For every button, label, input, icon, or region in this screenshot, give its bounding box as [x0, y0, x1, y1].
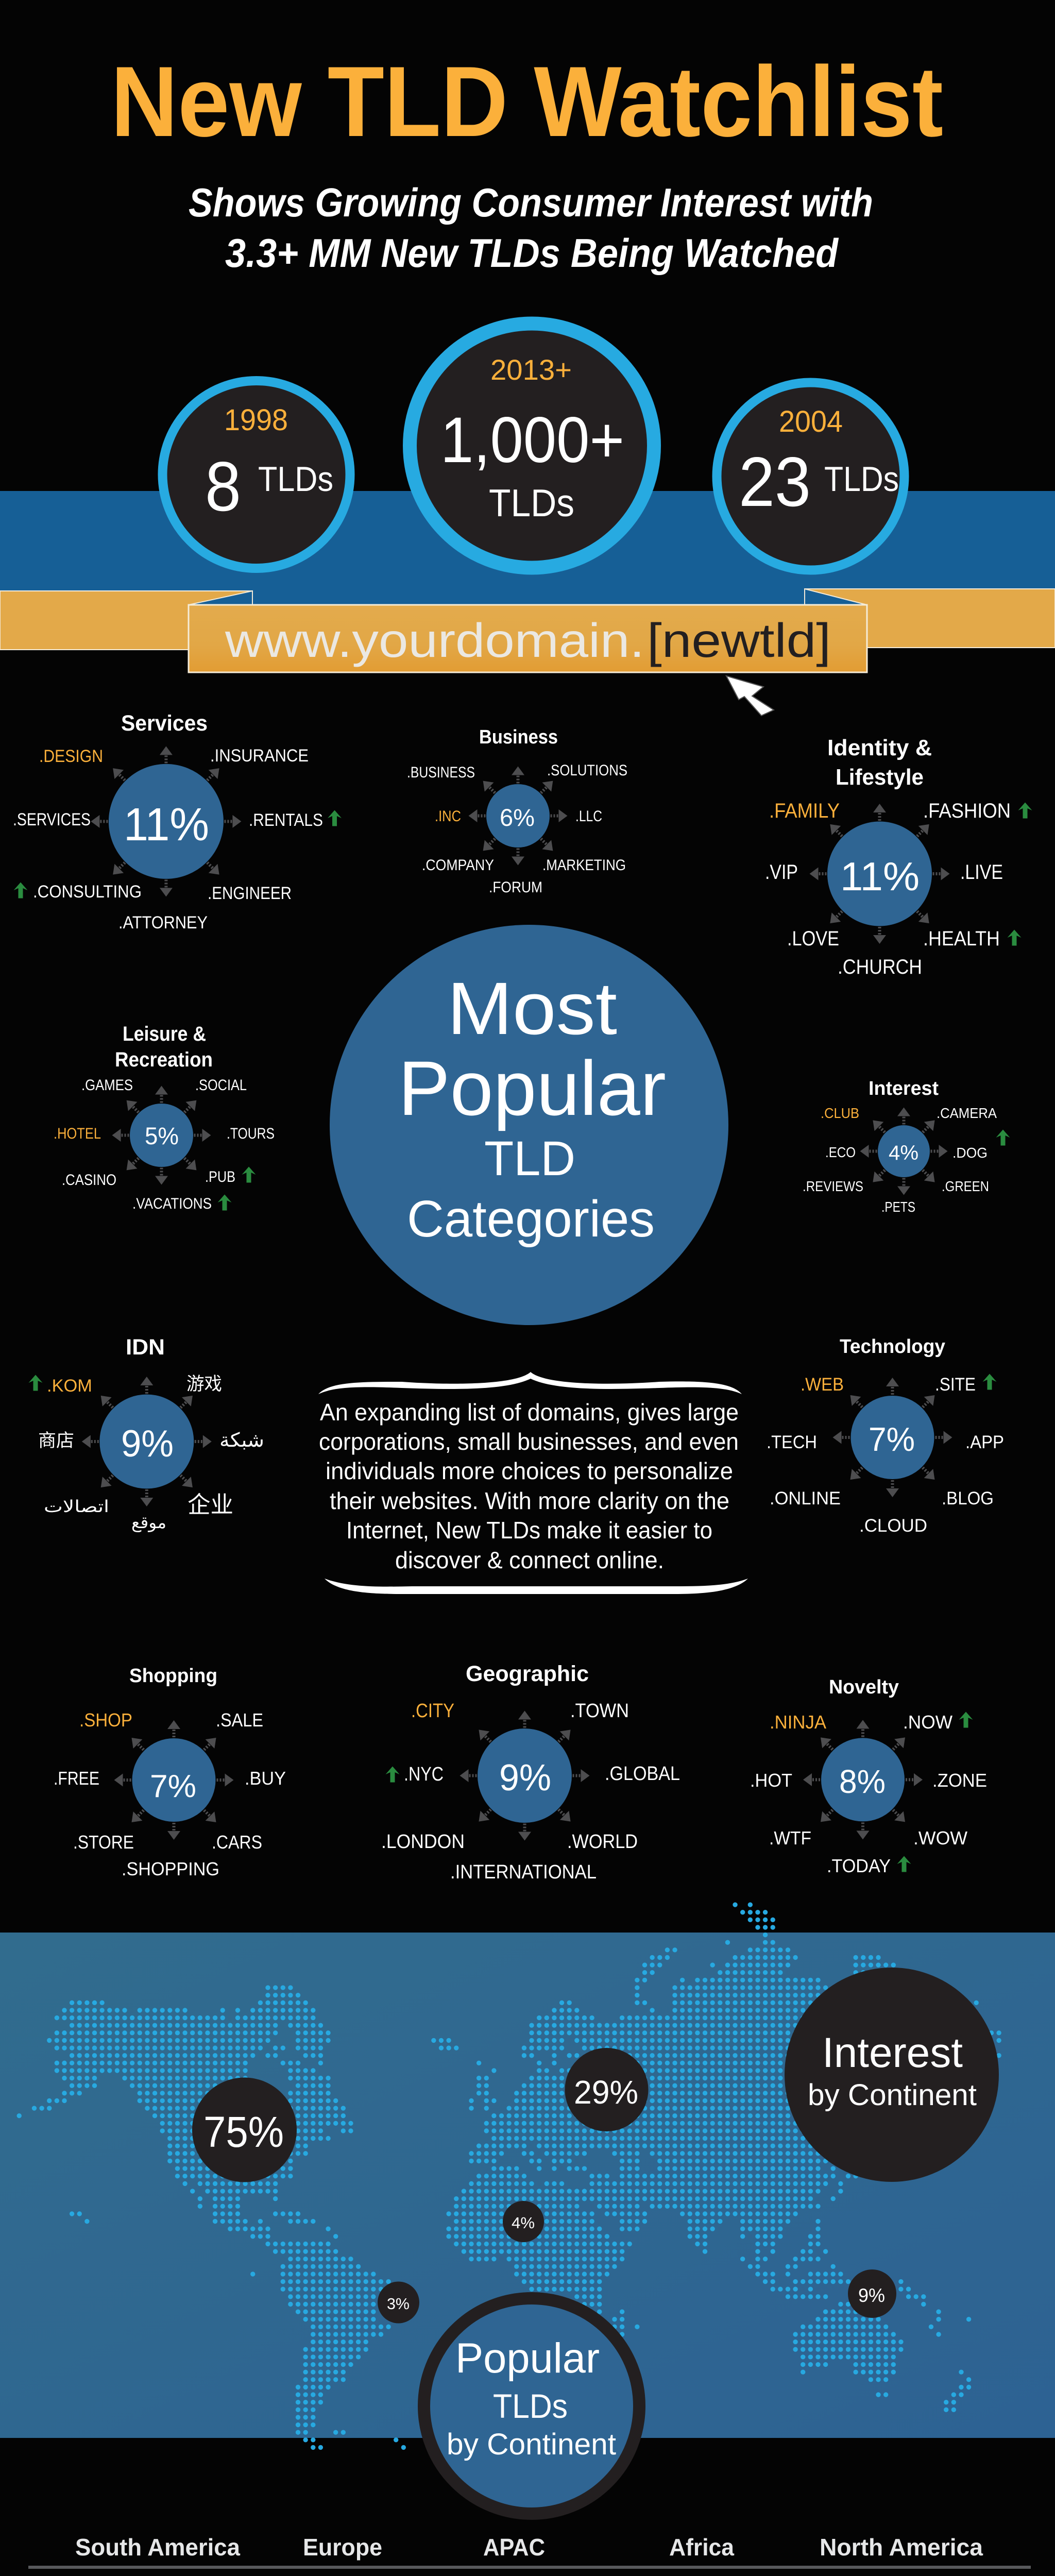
tld labels: .PUB — [205, 1168, 235, 1185]
tld labels — [13, 746, 342, 933]
circle: Most Popular TLD Categories: TLD — [484, 1131, 575, 1186]
tld labels: .KOM — [47, 1376, 92, 1396]
percentage circle — [851, 1396, 934, 1479]
tld labels: .ONLINE — [770, 1488, 841, 1509]
tld labels: .APP — [965, 1432, 1004, 1452]
bubble: 29% Europe — [565, 2048, 648, 2131]
tld labels: .GAMES — [81, 1077, 133, 1094]
panel: Business — [407, 726, 627, 896]
tld labels: .CAMERA — [937, 1105, 997, 1121]
percentage circle: 9% — [499, 1757, 551, 1799]
circle: 2013+ 1,000+ TLDs: 2013+ — [490, 353, 572, 386]
tld labels: .ECO — [825, 1144, 856, 1160]
bubble: 9% APAC — [848, 2269, 896, 2318]
table header — [75, 2534, 983, 2561]
circle: 2013+ 1,000+ TLDs — [410, 324, 654, 568]
circle: Most Popular TLD Categories: Categories — [407, 1190, 655, 1248]
tld labels: .SHOPPING — [122, 1858, 219, 1879]
circle: Most Popular TLD Categories — [330, 925, 728, 1325]
percentage circle — [827, 821, 932, 926]
percentage circle — [821, 1738, 905, 1821]
percentage circle: 6% — [500, 804, 535, 831]
heading: Identity & Lifestyle: Identity & — [827, 735, 932, 760]
tld labels — [767, 1374, 1004, 1536]
tld labels: .LLC — [575, 808, 602, 825]
ribbon banner — [0, 589, 1055, 672]
tld labels: .LONDON — [381, 1831, 465, 1853]
percentage circle — [109, 764, 224, 879]
heading: Leisure & Recreation: Leisure & — [123, 1023, 206, 1045]
text block: description with curly braces: individuals more choices to personalize — [326, 1458, 733, 1484]
heading: Shopping: Shopping — [129, 1665, 217, 1687]
heading: Identity & Lifestyle: Lifestyle — [836, 765, 924, 790]
tld labels: .WTF — [769, 1827, 811, 1849]
bubble: 4% Africa — [503, 2201, 544, 2242]
tld labels: .CLOUD — [859, 1516, 927, 1536]
subtitle: 3.3+ MM New TLDs Being Watched — [225, 230, 839, 276]
tld labels: .ATTORNEY — [118, 913, 208, 933]
panel: Shopping — [54, 1665, 286, 1879]
subtitle — [189, 180, 873, 276]
radial arrows — [91, 746, 241, 896]
heading: Leisure & Recreation — [115, 1023, 213, 1071]
tld labels: .FASHION — [923, 800, 1011, 822]
panel: IDN — [29, 1335, 264, 1532]
radial arrows — [460, 1710, 589, 1840]
bubble: 3% South America: 3% — [387, 2295, 410, 2313]
table header: Africa — [669, 2534, 734, 2561]
tld labels: شبكة — [219, 1429, 264, 1451]
tld labels: .CASINO — [62, 1172, 116, 1189]
bubble: 75% North America — [192, 2077, 297, 2182]
table header: APAC — [483, 2534, 545, 2561]
ribbon banner: www.yourdomain. — [225, 614, 644, 667]
heading: Business: Business — [479, 726, 558, 748]
tld labels — [765, 800, 1032, 978]
tld labels: .SERVICES — [13, 810, 91, 829]
heading: Technology: Technology — [840, 1336, 945, 1358]
tld labels: .FREE — [54, 1768, 99, 1789]
tld labels: .SOCIAL — [195, 1077, 247, 1094]
radial arrows — [82, 1377, 212, 1506]
bubble: 4% Africa: 4% — [512, 2214, 535, 2232]
circle: Interest by Continent: by Continent — [808, 2078, 977, 2112]
title: New TLD Watchlist — [111, 46, 943, 158]
tld labels: .WEB — [801, 1375, 844, 1395]
bubble: 75% North America: 75% — [203, 2108, 284, 2156]
percentage circle — [486, 784, 550, 848]
tld labels: .HOT — [750, 1770, 792, 1791]
tld labels: .CITY — [411, 1700, 454, 1722]
text block: description with curly braces: corporations, small businesses, and even — [319, 1428, 739, 1455]
circle: 1998 8 TLDs: 1998 — [224, 403, 288, 437]
circle: Most Popular TLD Categories: Most — [447, 967, 617, 1050]
tld labels: .COMPANY — [422, 857, 494, 874]
tld labels: اتصالات — [44, 1497, 109, 1516]
tld labels: .TOURS — [227, 1125, 275, 1142]
text block: description with curly braces: Internet, New TLDs make it easier to — [346, 1517, 712, 1544]
tld labels: .SOLUTIONS — [547, 762, 627, 779]
tld labels: .ENGINEER — [208, 884, 292, 903]
text block: description with curly braces: An expanding list of domains, gives large — [320, 1399, 739, 1426]
tld labels: .CARS — [212, 1832, 262, 1853]
tld labels: .VACATIONS — [132, 1195, 212, 1212]
tld labels: .TODAY — [827, 1855, 891, 1876]
tld labels: .HOTEL — [54, 1125, 101, 1142]
circle: Popular TLDs by Continent: by Continent — [447, 2428, 616, 2461]
tld labels: .WORLD — [567, 1831, 638, 1853]
tld labels — [750, 1711, 987, 1876]
tld labels: .PETS — [881, 1199, 915, 1215]
circle: 2013+ 1,000+ TLDs: 1,000+ — [440, 404, 624, 476]
tld labels: .LOVE — [787, 927, 839, 950]
tld labels: .BUY — [245, 1768, 286, 1789]
tld labels: .GLOBAL — [605, 1763, 680, 1785]
radial arrows — [832, 1378, 952, 1497]
radial arrows — [860, 1108, 948, 1195]
circle: 2013+ 1,000+ TLDs: TLDs — [489, 481, 574, 524]
tld labels: .HEALTH — [923, 927, 1000, 950]
percentage circle — [478, 1728, 572, 1823]
text block: description with curly braces — [318, 1372, 748, 1594]
heading: Leisure & Recreation: Recreation — [115, 1048, 213, 1071]
tld labels: .BUSINESS — [407, 764, 475, 781]
table header: Europe — [303, 2534, 382, 2561]
tld labels: .NYC — [404, 1764, 444, 1785]
bubble: 29% Europe: 29% — [574, 2074, 638, 2111]
percentage circle: 4% — [889, 1142, 918, 1164]
tld labels: .CLUB — [821, 1105, 859, 1121]
tld labels: .TOWN — [570, 1700, 629, 1722]
tld labels: 商店 — [38, 1431, 74, 1451]
circle: 2004 23 TLDs: 23 — [739, 443, 811, 521]
tld labels: .CONSULTING — [33, 882, 142, 902]
tld labels: .NOW — [903, 1711, 952, 1733]
percentage circle: 11% — [840, 854, 920, 899]
percentage circle — [132, 1738, 215, 1822]
percentage circle — [130, 1104, 193, 1167]
ribbon banner: [newtld] — [647, 614, 831, 667]
bubble: 3% South America — [378, 2281, 419, 2324]
circle: 2004 23 TLDs: 2004 — [779, 405, 843, 438]
heading: Interest: Interest — [869, 1078, 939, 1099]
table header: North America — [820, 2534, 983, 2561]
tld labels: .LIVE — [960, 861, 1003, 884]
tld labels — [381, 1700, 680, 1883]
tld labels: .STORE — [73, 1832, 134, 1853]
circle: 1998 8 TLDs: TLDs — [258, 460, 333, 499]
percentage circle: 7% — [150, 1769, 196, 1804]
panel: Identity & Lifestyle — [765, 735, 1032, 978]
percentage circle: 9% — [121, 1423, 174, 1465]
subtitle: Shows Growing Consumer Interest with — [189, 180, 873, 225]
radial arrows — [112, 1086, 211, 1185]
panel: Leisure & Recreation — [54, 1023, 275, 1212]
panel: Services — [13, 711, 342, 933]
tld labels: .GREEN — [942, 1178, 989, 1194]
text block: description with curly braces: their websites. With more clarity on the — [330, 1487, 729, 1514]
radial arrows — [810, 804, 950, 944]
percentage circle — [878, 1125, 930, 1177]
tld labels: .REVIEWS — [803, 1178, 863, 1194]
tld labels — [407, 762, 627, 896]
tld labels: .TECH — [767, 1432, 817, 1452]
tld labels: .SHOP — [79, 1709, 132, 1731]
tld labels: .WOW — [913, 1827, 967, 1849]
circle: Popular TLDs by Continent — [424, 2298, 639, 2514]
tld labels — [54, 1077, 275, 1212]
tld labels: .FAMILY — [769, 800, 840, 822]
tld labels: .DOG — [952, 1145, 988, 1161]
tld labels: .SALE — [216, 1709, 263, 1731]
tld labels: .CHURCH — [838, 956, 922, 978]
panel: Geographic — [381, 1662, 680, 1883]
icon: cursor arrow — [726, 676, 774, 716]
tld labels — [803, 1105, 1010, 1215]
tld labels: .SITE — [935, 1375, 976, 1395]
tld labels — [29, 1374, 264, 1532]
circle: 1998 8 TLDs — [163, 381, 350, 568]
radial arrows — [114, 1720, 234, 1840]
percentage circle — [99, 1394, 194, 1489]
tld labels: .RENTALS — [249, 810, 323, 830]
tld labels: .DESIGN — [39, 747, 103, 766]
chart: dotted world map — [19, 1905, 999, 2447]
heading: Novelty: Novelty — [829, 1676, 899, 1698]
map band background — [0, 1933, 1055, 2438]
tld labels — [54, 1709, 286, 1879]
heading: Geographic: Geographic — [466, 1662, 589, 1686]
circle: Most Popular TLD Categories: Popular — [398, 1045, 666, 1131]
table: popular TLDs by continent — [28, 2534, 1031, 2576]
heading: Services: Services — [121, 711, 208, 736]
tld labels: .VIP — [765, 861, 798, 884]
bubble: 9% APAC: 9% — [858, 2285, 885, 2306]
tld labels: 企业 — [188, 1492, 233, 1518]
tld labels: .INTERNATIONAL — [450, 1861, 597, 1883]
heading: Identity & Lifestyle — [827, 735, 932, 790]
panel: Technology — [767, 1336, 1004, 1536]
circle: Popular TLDs by Continent: Popular — [455, 2335, 600, 2382]
tld labels: .INC — [435, 808, 461, 825]
heading: IDN: IDN — [126, 1335, 165, 1360]
tld labels: .NINJA — [770, 1711, 826, 1733]
panel: Novelty — [750, 1676, 987, 1876]
circle: Interest by Continent — [785, 1968, 999, 2182]
circle: Interest by Continent: Interest — [822, 2029, 963, 2076]
circle: 2004 23 TLDs: TLDs — [824, 460, 899, 499]
percentage circle: 8% — [839, 1763, 886, 1800]
tld labels: .ZONE — [932, 1770, 987, 1791]
percentage circle: 7% — [869, 1420, 915, 1458]
percentage circle: 5% — [145, 1122, 179, 1149]
tld labels: 游戏 — [186, 1374, 222, 1394]
tld labels: موقع — [131, 1513, 166, 1532]
circle: 2004 23 TLDs — [717, 382, 905, 570]
text block: description with curly braces: discover & connect online. — [395, 1547, 664, 1573]
circle: Popular TLDs by Continent: TLDs — [493, 2387, 568, 2425]
panel: Interest — [803, 1078, 1010, 1215]
radial arrows — [469, 767, 568, 866]
radial arrows — [803, 1720, 923, 1839]
tld labels: .INSURANCE — [210, 746, 309, 766]
table header: South America — [75, 2534, 240, 2561]
blue band behind year circles — [0, 491, 1055, 607]
tld labels: .FORUM — [489, 879, 542, 896]
tld labels: .MARKETING — [542, 857, 626, 874]
tld labels: .BLOG — [942, 1488, 994, 1509]
circle: 1998 8 TLDs: 8 — [205, 447, 241, 526]
percentage circle: 11% — [124, 799, 209, 851]
